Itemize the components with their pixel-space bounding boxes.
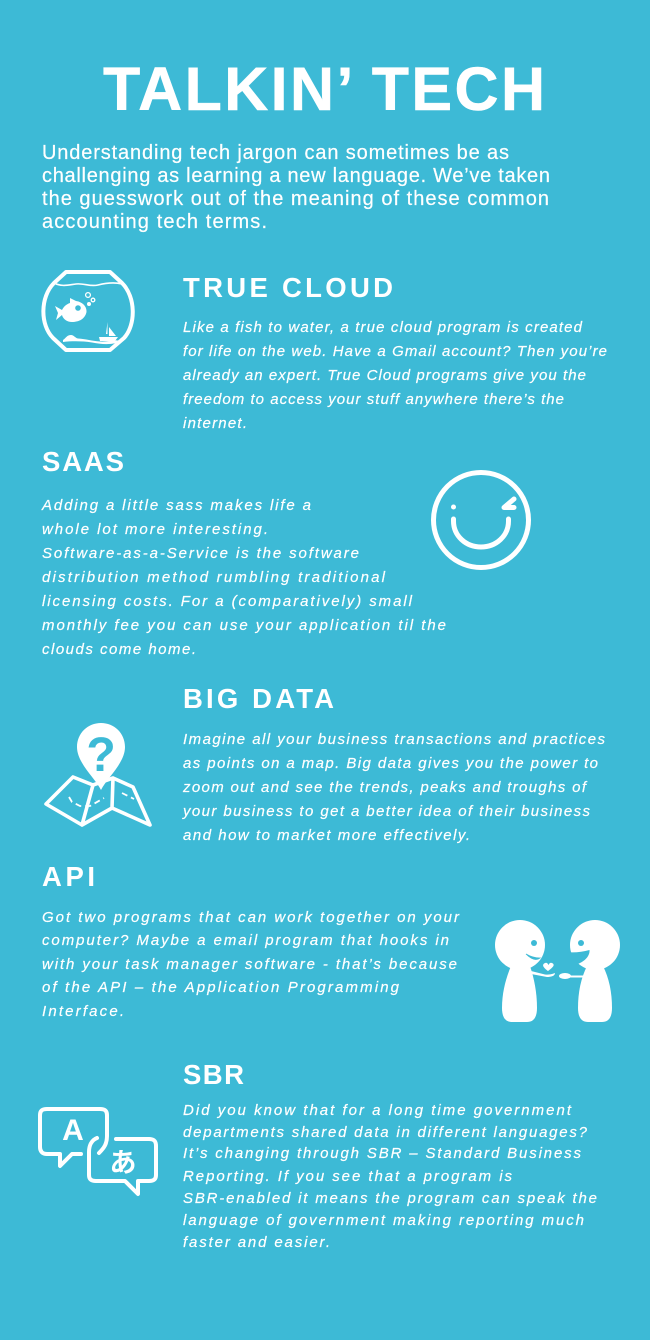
api description [42,909,460,1020]
icon: winking smiley [434,472,528,568]
saas description: monthly fee you can use your application til the [42,617,446,634]
saas description [41,497,446,658]
true cloud description [183,319,607,432]
intro text: the guesswork out of the meaning of these common [42,188,549,210]
big data description: Imagine all your business transactions and practices [183,731,606,748]
true cloud description: for life on the web. Have a Gmail account? Then you’re [183,343,607,360]
api description: Got two programs that can work together on your [42,909,460,926]
saas description: Software-as-a-Service is the software [42,545,359,562]
saas description: clouds come home. [42,641,196,658]
sbr description: It’s changing through SBR – Standard Business [183,1145,582,1162]
heading: big data: BIG DATA [183,683,334,714]
big data description [182,731,606,844]
icon: translation speech bubbles: あ [110,1148,136,1178]
icon: translation speech bubbles [40,1109,156,1194]
big data description: as points on a map. Big data gives you the power to [183,755,598,772]
heading: saas: SAAS [42,446,124,477]
sbr description: Reporting. If you see that a program is [183,1168,512,1185]
icon: map with question pin: ? [86,729,116,782]
true cloud description: freedom to access your stuff anywhere there’s the [183,391,564,408]
true cloud description: Like a fish to water, a true cloud program is created [183,319,583,336]
saas description: distribution method rumbling traditional [42,569,386,586]
true cloud description: internet. [183,415,247,432]
api description: of the API – the Application Programming [42,979,400,996]
title: TALKIN’ TECH [103,55,545,123]
sbr description: Did you know that for a long time government [183,1102,572,1119]
big data description: and how to market more effectively. [183,827,470,844]
sbr description: departments shared data in different languages? [183,1124,588,1141]
heading: true cloud: TRUE CLOUD [183,272,393,303]
sbr description: faster and easier. [183,1234,330,1251]
saas description: licensing costs. For a (comparatively) small [42,593,413,610]
sbr description: language of government making reporting much [183,1212,584,1229]
saas description: Adding a little sass makes life a [41,497,311,514]
intro text: Understanding tech jargon can sometimes be as [42,142,509,164]
saas description: whole lot more interesting. [42,521,268,538]
api description: with your task manager software - that’s because [42,956,457,973]
api description: Interface. [42,1003,124,1020]
sbr description: SBR-enabled it means the program can speak the [183,1190,597,1207]
heading: sbr: SBR [183,1059,244,1090]
api description: computer? Maybe a email program that hooks in [42,932,449,949]
icon: map with question pin [46,723,150,825]
sbr description [183,1102,597,1251]
big data description: your business to get a better idea of their business [182,803,590,820]
icon: two people sharing [495,920,620,1022]
intro text: challenging as learning a new language. We’ve taken [42,165,550,187]
intro text [42,142,550,233]
icon: fish bowl [43,272,133,350]
icon: translation speech bubbles: A [62,1114,84,1147]
intro text: accounting tech terms. [42,211,267,233]
true cloud description: already an expert. True Cloud programs give you the [183,367,586,384]
heading: api: API [42,861,95,892]
big data description: zoom out and see the trends, peaks and troughs of [182,779,588,796]
